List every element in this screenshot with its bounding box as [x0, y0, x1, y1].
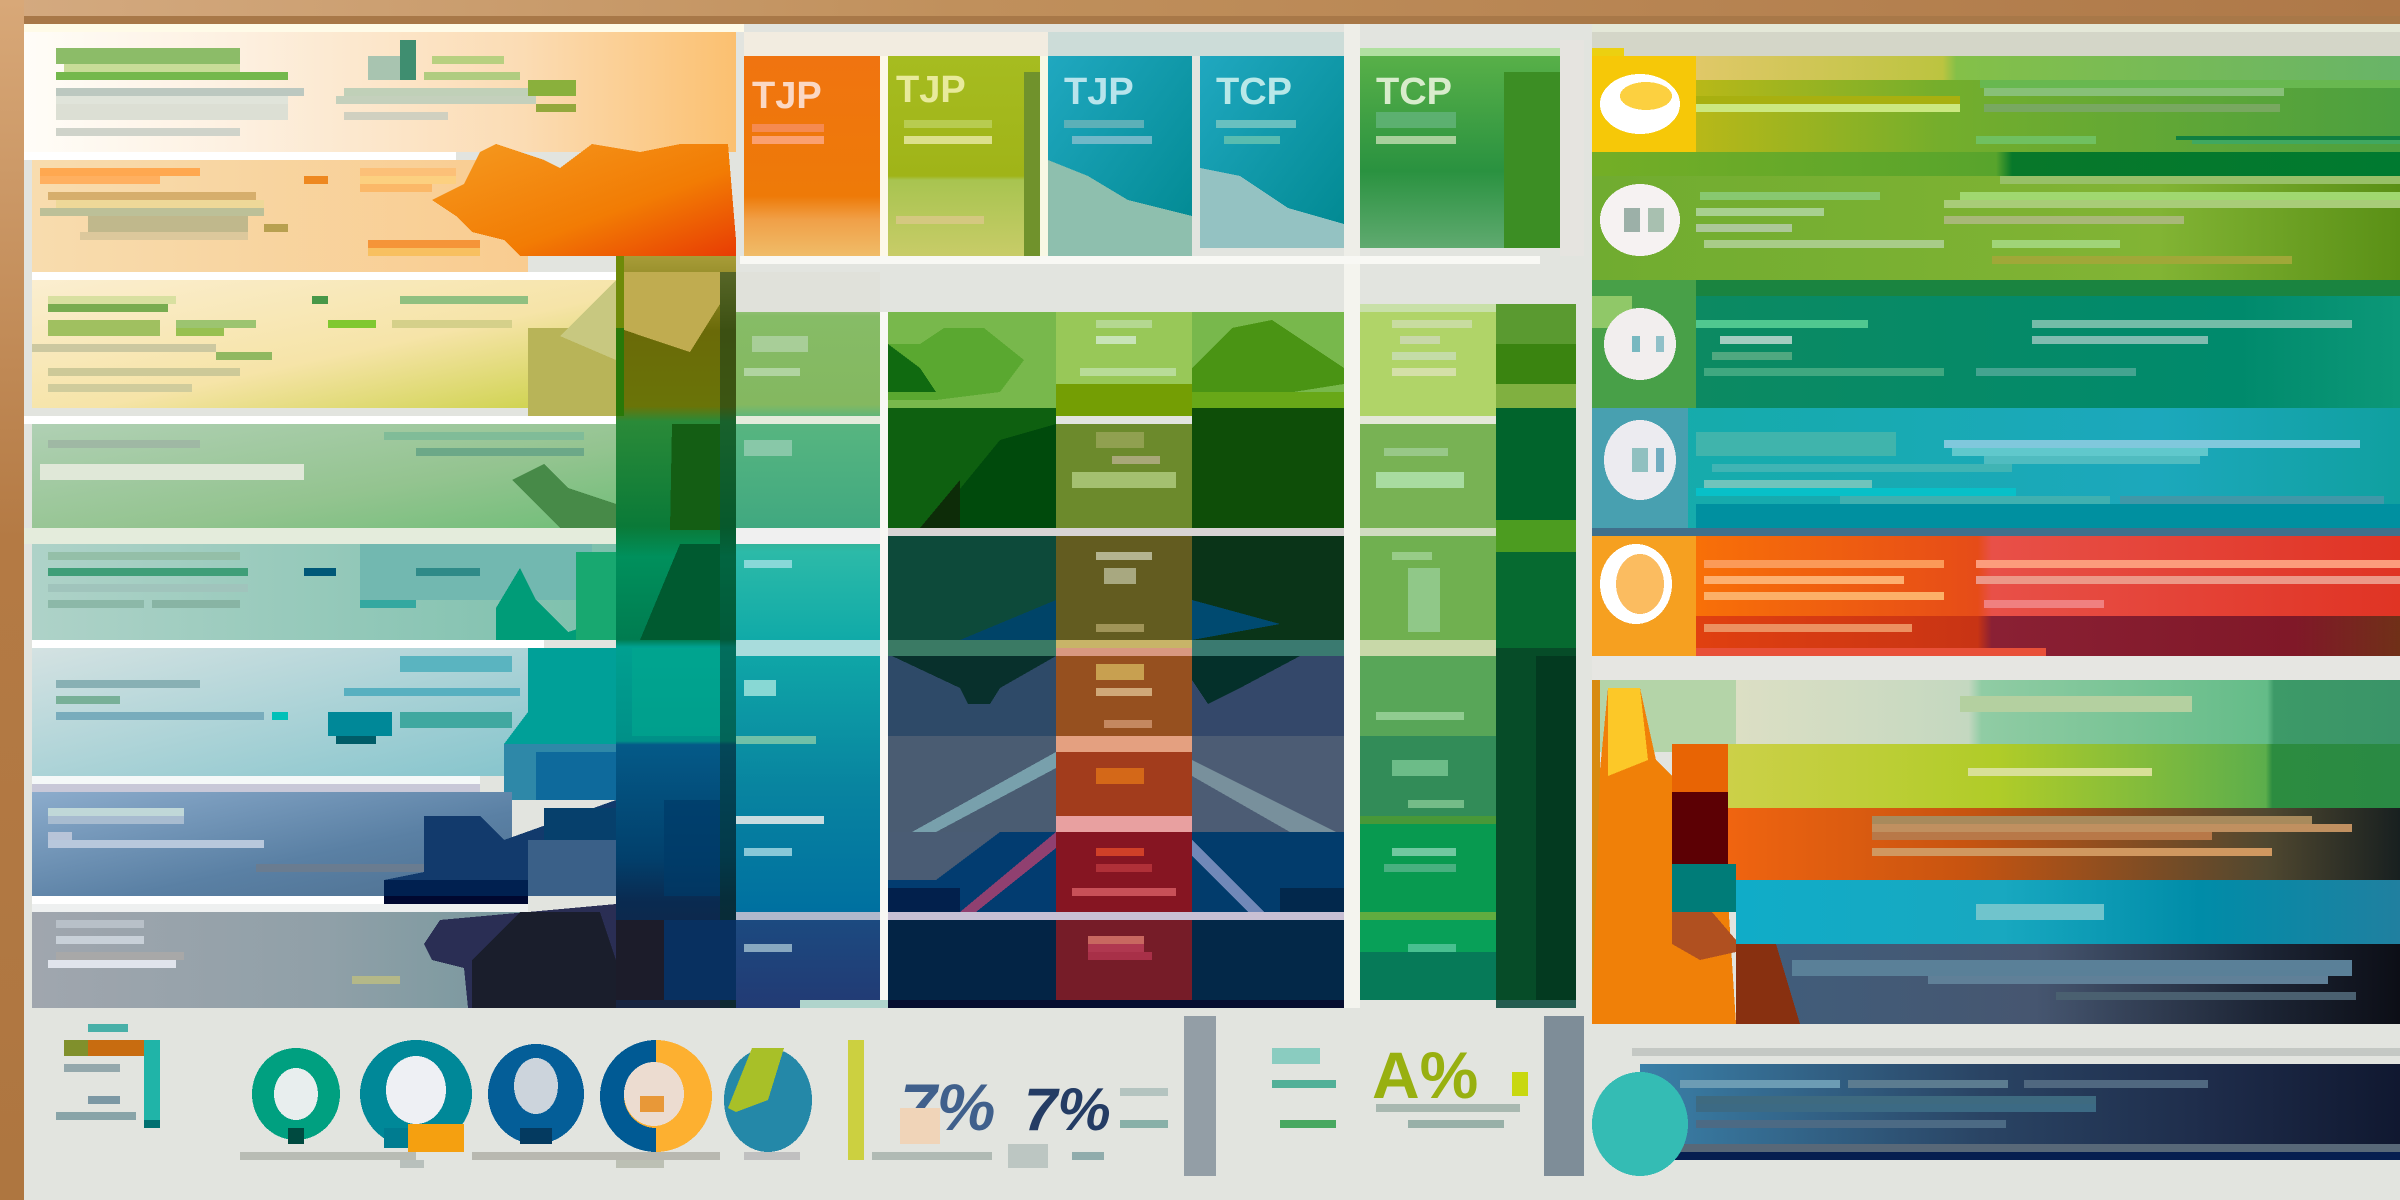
chart glyphs with percent labels: 7% — [1024, 1076, 1111, 1143]
right grid gutters — [1344, 264, 1360, 1008]
central grid panel — [888, 312, 1344, 1008]
icon: white badge 4 — [1604, 420, 1676, 500]
icon: white badge 3 — [1604, 308, 1676, 380]
grid row 7 navy — [888, 920, 1344, 1008]
bottom edge of grid — [800, 1000, 888, 1008]
grey vertical bar — [1184, 1016, 1216, 1176]
tile 2 lime: TJP — [896, 69, 966, 111]
column of stacked teal/green cells — [736, 272, 880, 1008]
tile 5 green: TCP — [1376, 71, 1452, 113]
icon: yellow badge — [1600, 74, 1680, 134]
panel: right ribbon list — [1592, 24, 2400, 656]
cell column D — [1496, 304, 1576, 1008]
tile 5 green — [1360, 48, 1560, 248]
tile 3 teal: TJP — [1064, 71, 1134, 113]
grey vertical bar right — [1544, 1016, 1584, 1176]
percent glyph: A% — [1372, 1038, 1478, 1112]
tile 3 teal — [1048, 56, 1192, 256]
icon: orange hand figure — [1592, 680, 1800, 1024]
ring captions — [240, 1152, 800, 1168]
row 7 blue panel — [32, 776, 616, 904]
row 4 green panel — [24, 416, 616, 536]
icon: ring 2 — [360, 1040, 472, 1152]
grid row 1 leaves — [888, 312, 1344, 416]
icon: ring 1 — [252, 1048, 340, 1144]
icon: ring 3 — [488, 1044, 584, 1144]
icon: teal circle — [1592, 1072, 1688, 1176]
row 1 header panel — [24, 24, 744, 152]
ribbon 5 orange-red — [1592, 528, 2400, 656]
tile 1 orange: TJP — [752, 75, 822, 117]
percent glyph — [1372, 1038, 1528, 1128]
top tile row — [740, 24, 1584, 264]
ribbon 2 lime — [1592, 176, 2400, 280]
grid divider 2 — [888, 912, 1344, 920]
ribbon 3 green-teal — [1592, 280, 2400, 408]
grid row 2 dark green — [888, 408, 1344, 528]
panel: lower right bands — [1592, 656, 2400, 1024]
tile 4 teal — [1200, 56, 1344, 248]
row 3 yellow panel — [32, 272, 624, 416]
chart glyphs with percent labels — [872, 1070, 1168, 1168]
grid row 3 dark teal — [888, 528, 1344, 640]
grid divider — [888, 640, 1344, 656]
ribbon 1 yellow to green — [1592, 48, 2400, 176]
ribbon 4 teal-blue — [1592, 408, 2400, 528]
row 6 pale blue panel — [32, 640, 616, 800]
icon: white badge 5 — [1600, 544, 1672, 624]
icon: white badge 2 — [1600, 184, 1680, 256]
central vertical stem column — [616, 256, 736, 1008]
tile 1 orange — [744, 56, 880, 256]
row 5 teal panel — [24, 528, 624, 640]
chart glyphs with percent labels: 7% — [900, 1070, 995, 1144]
white column gutter — [880, 312, 888, 1008]
cell column C — [1360, 312, 1496, 1000]
orange polygon shape — [432, 144, 736, 256]
grid row 4 slate — [888, 656, 1344, 736]
row 8 grey panel — [32, 896, 616, 1008]
panel: right green cells — [1360, 304, 1576, 1008]
icon: ring 4 — [600, 1040, 712, 1152]
panel: navy footer bar — [1592, 1048, 2400, 1176]
yellow divider line — [848, 1040, 864, 1160]
panel: bottom left key — [56, 1024, 160, 1128]
ring icon row — [240, 1040, 812, 1168]
grid row 5 grey and red — [888, 736, 1344, 832]
tile 2 lime — [888, 56, 1040, 256]
tile 4 teal: TCP — [1216, 71, 1292, 113]
row 2 orange panel — [24, 152, 528, 272]
panel: left stack of rows — [24, 24, 744, 1008]
grid row 6 blue and crimson — [888, 832, 1344, 912]
mini legend bars — [1272, 1048, 1336, 1128]
icon: pie 5 — [724, 1048, 812, 1152]
